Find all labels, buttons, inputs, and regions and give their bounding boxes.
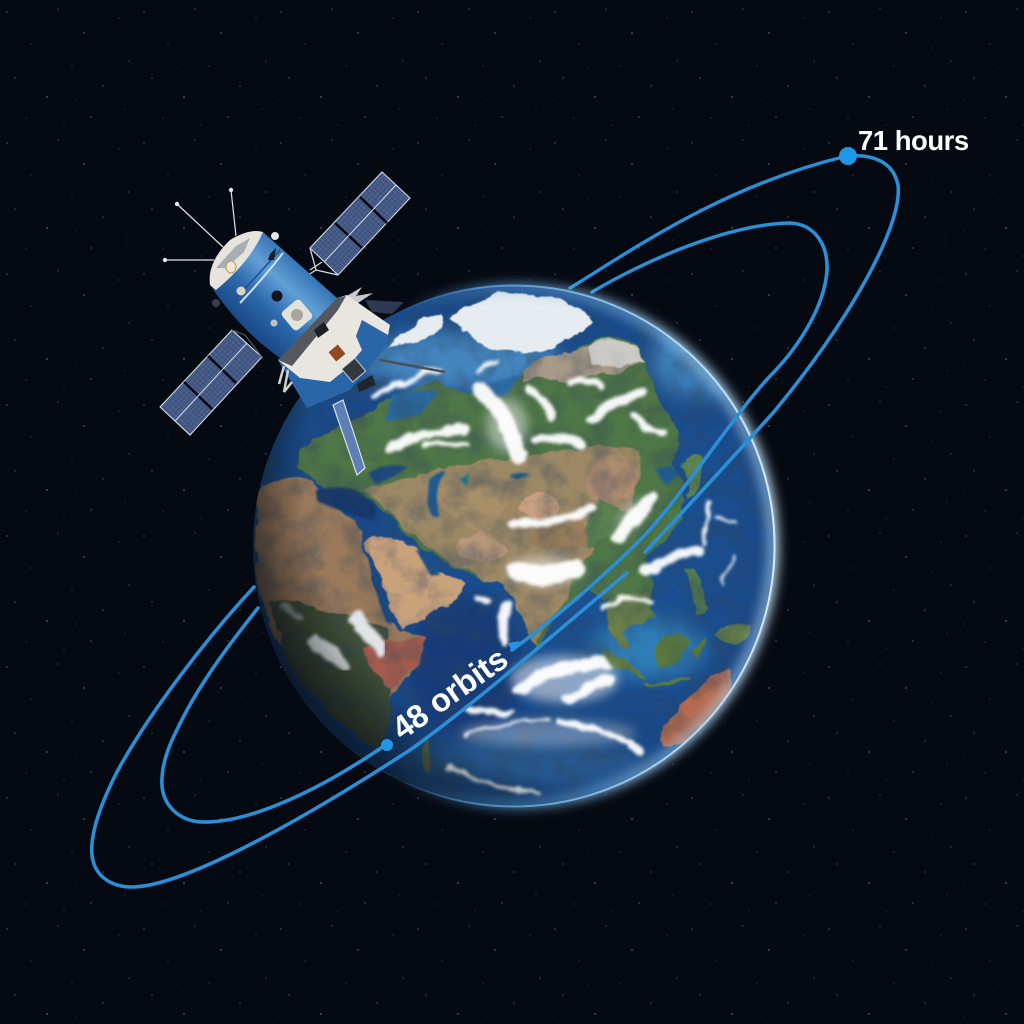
surface mottling — [250, 280, 781, 811]
top cap — [210, 231, 279, 307]
land masses — [257, 337, 754, 770]
clouds: east Africa — [284, 604, 380, 667]
land: Eurasia — [297, 337, 681, 648]
atmosphere rim — [254, 286, 774, 806]
inner orbit — [162, 608, 387, 822]
marker: 71 hours dot — [839, 147, 857, 165]
main cylinder body — [210, 232, 346, 366]
earth shading — [253, 397, 587, 807]
land: Arabia — [367, 537, 463, 628]
earth globe — [250, 280, 781, 811]
solar panel: upper right — [305, 172, 410, 277]
orbit: front segments across Earth — [92, 156, 898, 887]
earth surface — [250, 280, 781, 811]
service module — [278, 295, 390, 408]
clouds: broad haze — [460, 398, 652, 746]
ocean tones — [358, 324, 750, 787]
inner atmosphere haze — [412, 286, 774, 807]
antennas — [163, 188, 236, 262]
land: Madagascar — [423, 740, 432, 770]
orbit: back segments behind Earth — [570, 156, 847, 292]
land: Africa — [254, 476, 426, 700]
marker: inner orbit end — [508, 641, 520, 652]
land: Australia — [659, 669, 731, 745]
solar panel: lower strip — [333, 400, 365, 475]
boom and small panel behind — [380, 360, 445, 372]
marker: 48 orbits dot — [381, 739, 393, 751]
inland seas — [316, 375, 679, 625]
ice: arctic — [390, 294, 645, 367]
solar panel: lower left — [160, 330, 262, 435]
outer orbit — [92, 573, 627, 887]
clouds — [372, 361, 737, 794]
satellite — [160, 172, 445, 475]
land: Southeast Asia and islands — [605, 592, 652, 650]
label: 71 hours: 71 hours — [858, 125, 969, 156]
atmosphere glow — [254, 284, 778, 808]
label: 48 orbits: 48 orbits — [385, 640, 514, 747]
